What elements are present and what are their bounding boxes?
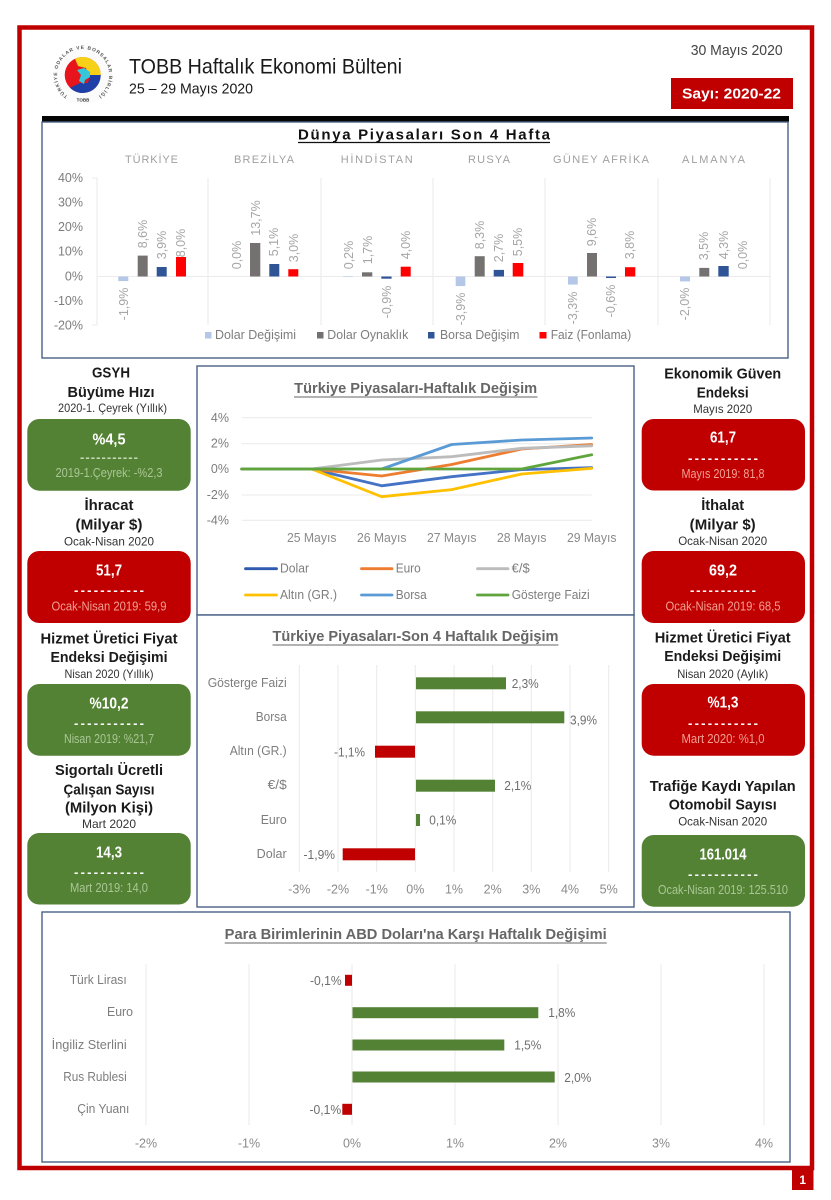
card: export: Ocak-Nisan 2019: 59,9	[52, 600, 167, 614]
y axis labels: -20%	[54, 318, 83, 332]
x axis labels: 1%	[445, 882, 463, 896]
heading: service price annual: Nisan 2020 (Yıllık)	[64, 667, 154, 681]
category labels: €/$	[268, 778, 287, 792]
value labels	[304, 677, 597, 862]
value labels: -1,1%	[334, 746, 365, 760]
card: service price annual	[27, 684, 191, 756]
card: export: -----------	[74, 582, 144, 598]
card: car registrations	[642, 835, 805, 907]
x axis labels	[288, 882, 618, 896]
card: car registrations: 161.014	[700, 846, 747, 864]
heading: export: Ocak-Nisan 2020	[64, 534, 154, 548]
legend: Altın (GR.)	[280, 588, 337, 602]
bars	[342, 975, 555, 1115]
value labels: 1,8%	[548, 1006, 575, 1020]
heading: car registrations: Trafiğe Kaydı Yapılan	[650, 778, 796, 795]
heading: service price monthly: Hizmet Üretici Fiyat	[655, 630, 791, 646]
heading: currencies against USD: Para Birimlerinin ABD Doları'na Karşı Haftalık Değişimi	[225, 927, 607, 943]
heading: service price monthly: Endeksi Değişimi	[664, 648, 781, 665]
heading: import	[678, 497, 768, 548]
x axis labels	[287, 531, 616, 545]
panel: insured employees card group	[27, 762, 191, 904]
x axis labels: 4%	[755, 1137, 773, 1151]
data labels: 4,0%	[399, 231, 413, 259]
heading: import: Ocak-Nisan 2020	[678, 534, 768, 548]
y axis labels: -2%	[207, 488, 229, 502]
heading: insured employees: Mart 2020	[82, 817, 136, 831]
card: insured employees: 14,3	[96, 844, 122, 862]
panel: import card group	[642, 497, 805, 623]
x axis labels: -2%	[135, 1137, 157, 1151]
panel: weekly line chart	[197, 366, 634, 615]
y axis labels: 0%	[65, 270, 83, 284]
card: GSYH: %4,5	[92, 432, 126, 448]
card: service price monthly	[642, 684, 805, 756]
bar chart: country series	[118, 243, 729, 286]
legend: Dolar Değişimi	[215, 328, 296, 342]
data labels: 13,7%	[249, 200, 263, 236]
country labels	[125, 153, 746, 166]
card: service price annual: -----------	[74, 716, 144, 730]
x axis labels: 3%	[522, 882, 540, 896]
category labels	[208, 676, 287, 861]
card: import: 69,2	[709, 562, 737, 580]
heading: export	[64, 497, 154, 548]
icon: TOBB logo: TOBB	[77, 98, 90, 102]
data labels: 3,8%	[623, 231, 637, 259]
data labels: 0,0%	[230, 241, 244, 269]
data labels: 0,2%	[342, 241, 356, 269]
x axis labels: 29 Mayıs	[567, 531, 616, 545]
x axis labels: 2%	[484, 882, 502, 896]
y axis labels: 2%	[211, 436, 229, 450]
card: service price monthly: %1,3	[708, 694, 739, 712]
heading: confidence	[664, 366, 781, 416]
data labels: 3,9%	[155, 231, 169, 259]
country labels: RUSYA	[468, 154, 511, 166]
heading: confidence: Mayıs 2020	[693, 402, 752, 416]
data labels: 4,3%	[717, 231, 731, 259]
data labels: 1,7%	[361, 236, 375, 264]
panel: export card group	[27, 497, 191, 623]
category labels: İngiliz Sterlini	[52, 1038, 127, 1052]
data labels: 3,5%	[697, 232, 711, 260]
legend	[205, 328, 631, 342]
legend: Gösterge Faizi	[512, 588, 590, 602]
x axis labels: 0%	[343, 1137, 361, 1151]
value labels: -0,1%	[310, 974, 342, 988]
heading: service price monthly	[655, 630, 791, 681]
heading: export: (Milyar $)	[76, 516, 142, 534]
card: service price annual: Nisan 2019: %21,7	[64, 732, 154, 746]
y axis labels: 0%	[211, 462, 229, 476]
category labels: Dolar	[257, 847, 287, 861]
x axis labels: 27 Mayıs	[427, 531, 476, 545]
heading: car registrations	[650, 778, 796, 829]
x axis labels: 0%	[406, 882, 424, 896]
legend: Borsa	[396, 588, 427, 602]
heading: confidence: Endeksi	[697, 384, 749, 402]
y axis labels: 20%	[58, 220, 83, 234]
data labels: -2,0%	[678, 288, 692, 320]
legend: Dolar Oynaklık	[327, 328, 409, 342]
heading: service price annual: Hizmet Üretici Fiyat	[40, 630, 178, 648]
panel: four week bar chart	[197, 615, 634, 907]
panel: currencies against USD	[42, 912, 790, 1162]
y axis labels: 10%	[58, 244, 83, 258]
y axis labels: -10%	[54, 294, 83, 308]
card: confidence: -----------	[688, 450, 758, 466]
panel: monthly service price card group	[642, 630, 805, 756]
country labels: ALMANYA	[682, 154, 746, 166]
card: confidence: 61,7	[710, 430, 736, 446]
data labels: 8,6%	[136, 220, 150, 248]
panel: annual service price card group	[27, 630, 191, 756]
value labels: -0,1%	[310, 1103, 341, 1117]
heading: GSYH: GSYH	[92, 364, 130, 382]
heading: insured employees: Sigortalı Ücretli	[55, 762, 163, 779]
heading: service price annual	[40, 630, 178, 681]
panel: GSYH card group	[27, 364, 191, 491]
data labels: 5,5%	[511, 228, 525, 256]
heading: weekly line chart: Türkiye Piyasaları-Haftalık Değişim	[294, 381, 537, 397]
panel: car registrations card group	[642, 778, 805, 907]
data labels: -0,9%	[380, 286, 394, 318]
value labels: -1,9%	[304, 848, 335, 862]
card: confidence	[642, 419, 805, 490]
x axis labels: -1%	[366, 882, 388, 896]
page number	[792, 1170, 814, 1190]
card: service price monthly: -----------	[688, 716, 758, 730]
data labels: 0,0%	[736, 241, 750, 269]
data labels: 5,1%	[267, 228, 281, 256]
x axis labels	[135, 1137, 773, 1151]
card: export	[27, 551, 191, 623]
x axis labels: 2%	[549, 1137, 567, 1151]
data labels	[117, 200, 750, 325]
heading: GSYH: Büyüme Hızı	[68, 384, 154, 401]
data labels: -3,9%	[454, 293, 468, 325]
x axis labels: 28 Mayıs	[497, 531, 546, 545]
heading: four week bar chart: Türkiye Piyasaları-Son 4 Haftalık Değişim	[272, 629, 558, 645]
y axis labels: 4%	[211, 411, 229, 425]
y axis labels: 40%	[58, 171, 83, 185]
icon: TOBB logo: TÜRKİYE ODALAR VE BORSALAR BİRLİĞİ	[54, 46, 112, 99]
country labels: BREZİLYA	[234, 153, 295, 166]
legend: Faiz (Fonlama)	[551, 328, 631, 342]
value labels	[310, 974, 591, 1117]
card: confidence: Mayıs 2019: 81,8	[682, 467, 765, 481]
legend	[246, 562, 590, 602]
heading: GSYH	[58, 364, 167, 415]
legend: €/$	[512, 562, 530, 576]
value labels: 0,1%	[429, 814, 456, 828]
issue badge	[671, 78, 793, 109]
card: car registrations: Ocak-Nisan 2019: 125.510	[658, 883, 788, 897]
category labels: Euro	[261, 813, 287, 827]
category labels: Altın (GR.)	[230, 744, 287, 758]
heading: insured employees	[55, 762, 163, 831]
category labels: Borsa	[256, 710, 287, 724]
y axis labels: -4%	[207, 514, 229, 528]
heading: car registrations: Otomobil Sayısı	[669, 796, 777, 814]
x axis labels: 1%	[446, 1137, 464, 1151]
page number: 1	[799, 1173, 806, 1187]
heading: world markets: Dünya Piyasaları Son 4 Hafta	[298, 126, 551, 144]
header rule	[42, 116, 789, 122]
x axis labels: 25 Mayıs	[287, 531, 336, 545]
value labels: 3,9%	[570, 714, 597, 728]
card: GSYH	[27, 419, 191, 491]
x axis labels: -2%	[327, 882, 349, 896]
heading: insured employees: (Milyon Kişi)	[65, 800, 153, 816]
value labels: 1,5%	[514, 1039, 541, 1053]
card: car registrations: -----------	[688, 866, 758, 882]
data labels: 8,0%	[174, 229, 188, 257]
data labels: 3,0%	[287, 234, 301, 262]
card: insured employees: Mart 2019: 14,0	[70, 881, 148, 895]
card: export: 51,7	[96, 562, 122, 580]
category labels: Türk Lirası	[70, 973, 127, 987]
card: GSYH: 2019-1.Çeyrek: -%2,3	[56, 466, 163, 480]
x axis labels: 26 Mayıs	[357, 531, 406, 545]
country labels: TÜRKİYE	[125, 153, 178, 166]
heading: service price monthly: Nisan 2020 (Aylık)	[677, 667, 768, 681]
data labels: 2,7%	[492, 234, 506, 262]
heading: car registrations: Ocak-Nisan 2020	[678, 815, 768, 829]
category labels: Euro	[107, 1005, 133, 1019]
category labels	[52, 973, 133, 1116]
legend: Borsa Değişim	[440, 328, 520, 342]
heading: GSYH: 2020-1. Çeyrek (Yıllık)	[58, 401, 167, 415]
data labels: 8,3%	[473, 221, 487, 249]
legend: Dolar	[280, 562, 309, 576]
data labels: -1,9%	[117, 288, 131, 320]
y axis labels	[54, 171, 83, 332]
issue badge: Sayı: 2020-22	[682, 86, 781, 102]
y axis labels: 30%	[58, 196, 83, 210]
x axis labels: 3%	[652, 1137, 670, 1151]
card: import	[642, 551, 805, 623]
heading: import: İthalat	[701, 497, 744, 514]
category labels: Çin Yuanı	[77, 1102, 129, 1116]
heading: confidence: Ekonomik Güven	[664, 366, 781, 382]
card: import: Ocak-Nisan 2019: 68,5	[666, 600, 781, 614]
x axis labels: -1%	[238, 1137, 260, 1151]
bars	[343, 677, 564, 860]
x axis labels: 4%	[561, 882, 579, 896]
x axis labels: -3%	[288, 882, 310, 896]
heading: insured employees: Çalışan Sayısı	[64, 782, 154, 798]
card: service price monthly: Mart 2020: %1,0	[682, 732, 765, 746]
publication date: 30 Mayıs 2020	[691, 42, 783, 59]
country labels: GÜNEY AFRİKA	[553, 153, 650, 166]
panel: world markets	[42, 122, 788, 358]
heading: import: (Milyar $)	[690, 516, 756, 534]
card: insured employees	[27, 833, 191, 904]
title: TOBB Haftalık Ekonomi Bülteni	[129, 56, 402, 78]
value labels: 2,1%	[504, 779, 531, 793]
card: GSYH: -----------	[80, 450, 138, 464]
heading: service price annual: Endeksi Değişimi	[50, 649, 168, 666]
heading: export: İhracat	[84, 497, 134, 514]
card: insured employees: -----------	[74, 864, 144, 880]
legend: Euro	[396, 562, 421, 576]
category labels: Rus Rublesi	[63, 1070, 127, 1084]
data labels: -3,3%	[566, 292, 580, 324]
line chart	[242, 438, 592, 497]
data labels: 9,6%	[585, 218, 599, 246]
x axis labels: 5%	[600, 882, 618, 896]
value labels: 2,0%	[564, 1071, 591, 1085]
value labels: 2,3%	[512, 677, 539, 691]
panel: confidence card group	[642, 366, 805, 490]
data labels: -0,6%	[604, 285, 618, 317]
y axis labels	[207, 411, 229, 528]
card: service price annual: %10,2	[90, 696, 128, 712]
subtitle: date range: 25 – 29 Mayıs 2020	[129, 80, 253, 98]
card: import: -----------	[690, 582, 756, 598]
country labels: HİNDİSTAN	[341, 153, 413, 166]
category labels: Gösterge Faizi	[208, 676, 287, 690]
